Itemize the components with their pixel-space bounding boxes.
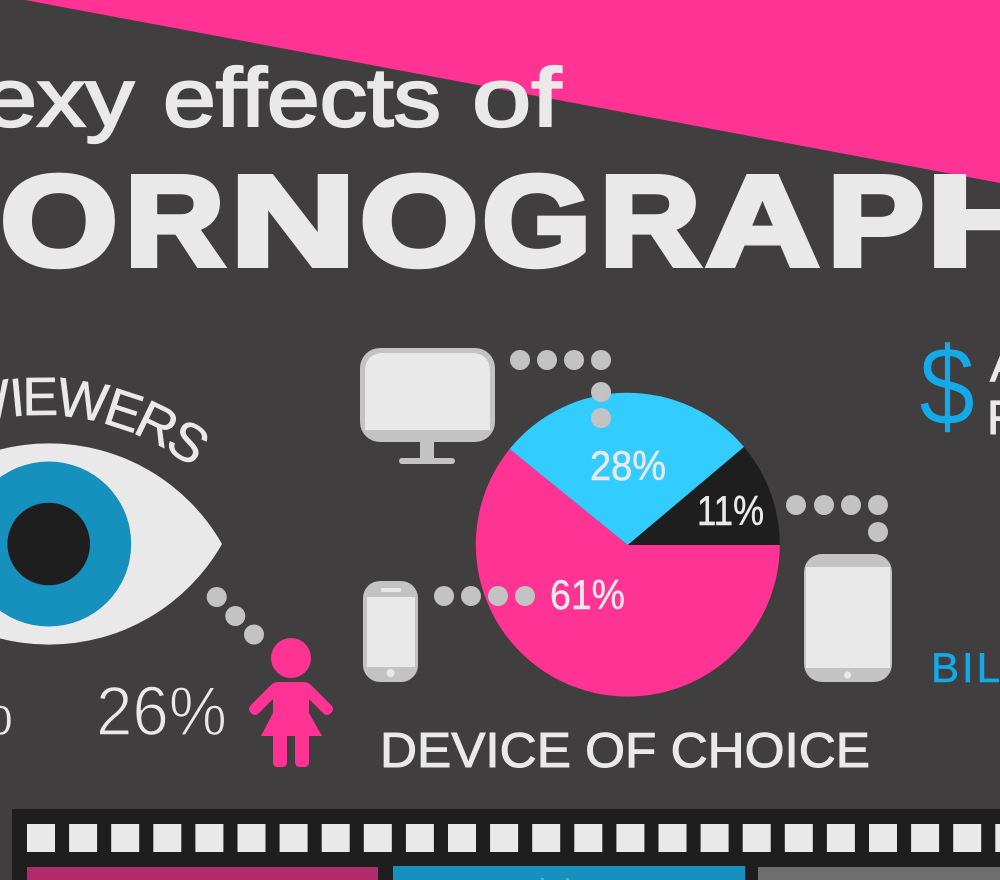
icon: woman [249, 638, 333, 767]
title line: main word: A [706, 150, 819, 293]
heading: device of choice: DEVICE OF CHOICE [380, 724, 870, 778]
pink corner banner [25, 0, 1000, 183]
dotted connector: monitor to pie [510, 350, 611, 428]
title line: effects: of [472, 51, 562, 144]
title line: main word: R [600, 150, 700, 293]
dotted connector: eye to woman [207, 587, 264, 644]
panel: viewers [0, 377, 333, 767]
film frame: magenta [27, 867, 378, 880]
film strip [12, 809, 1000, 880]
slice: computer 28% [510, 393, 744, 545]
panel: revenue [919, 324, 1000, 691]
title line: effects [0, 51, 562, 144]
title line: main word: G [482, 150, 591, 293]
percentage: women 26%: 26% [96, 672, 227, 750]
dotted connector: phone to pie [434, 586, 535, 606]
title line: main word: O [0, 149, 118, 292]
icon: smartphone [363, 581, 418, 682]
title line: main word: N [230, 150, 356, 293]
label: 61%: 61% [550, 571, 625, 618]
film sprocket holes [27, 824, 1000, 852]
label: 11%: 11% [697, 487, 764, 534]
icon: desktop monitor [360, 348, 495, 464]
pie chart: device of choice [476, 393, 780, 697]
title line: main word: O [360, 149, 478, 292]
slice: phone 61% [476, 449, 780, 697]
slice: tablet 11% [628, 447, 780, 545]
title line: main word [0, 149, 1000, 293]
icon: eye [0, 443, 222, 645]
film frame: blue [393, 866, 745, 880]
icon: dollar sign: $ [919, 324, 975, 449]
label: 28%: 28% [590, 442, 666, 489]
icon: tablet [804, 554, 892, 682]
title line: main word: R [125, 150, 224, 293]
film frame: grey [758, 867, 1000, 880]
title line: effects: effects [163, 51, 441, 144]
title line: main word: P [827, 149, 924, 292]
dotted connector: tablet to pie [786, 495, 888, 542]
